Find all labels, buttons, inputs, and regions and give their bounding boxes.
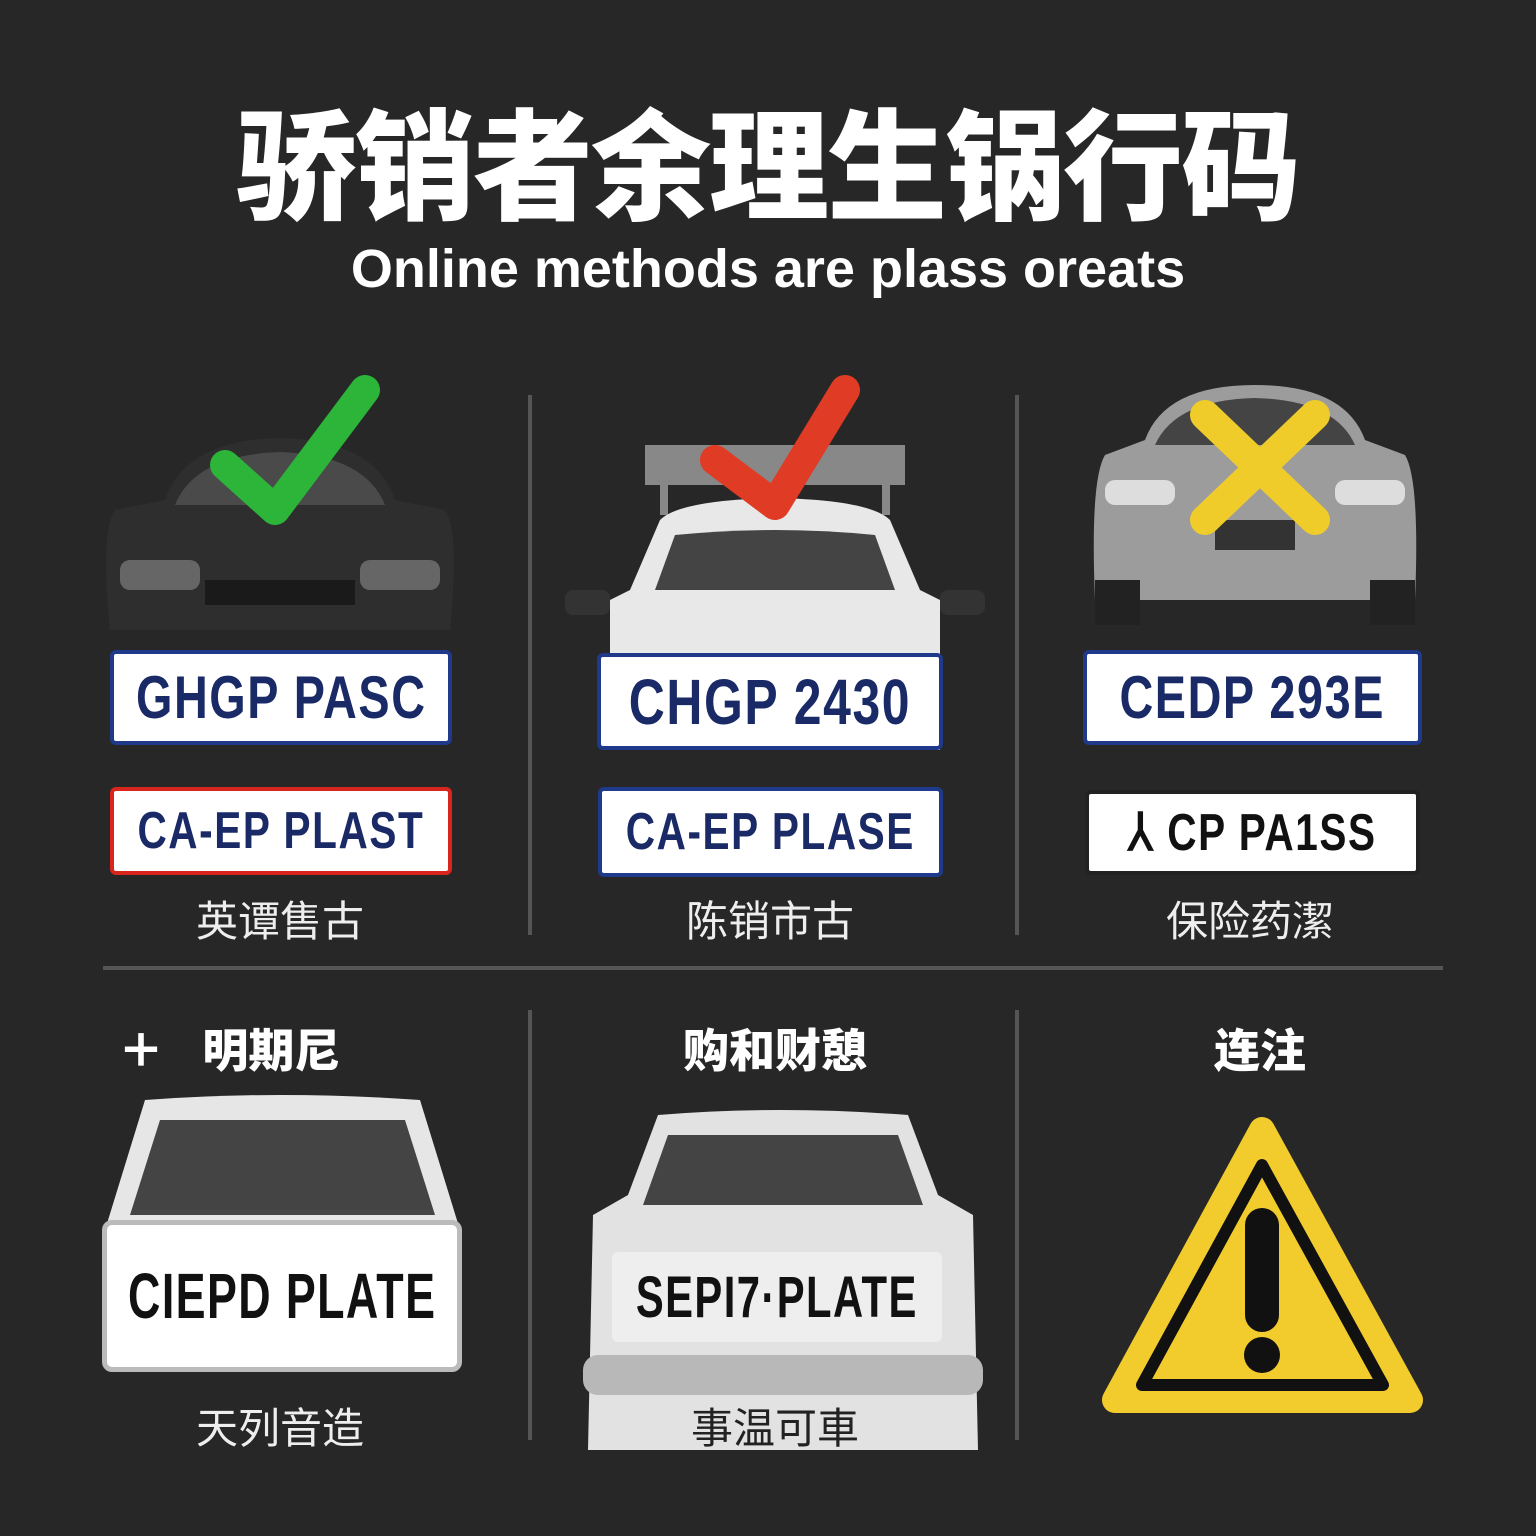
- panel: bottom-middle: [583, 1025, 983, 1452]
- car: white wagon: [108, 1095, 458, 1222]
- plate 2: [598, 787, 943, 877]
- panel: bottom-right: [1102, 1025, 1423, 1413]
- plate 2: ⅄ CP PA1SS: [1128, 804, 1377, 862]
- icon: green check: [210, 375, 380, 525]
- plate 2: CA-EP PLASE: [626, 803, 915, 861]
- plate: CIEPD PLATE: [128, 1260, 436, 1332]
- icon: warning triangle: [1102, 1117, 1423, 1413]
- title: 骄销者余理生锅行码: [237, 71, 1299, 245]
- panel: top-left car: [110, 375, 452, 945]
- plate 1: CEDP 293E: [1120, 664, 1385, 731]
- heading: 连注: [1214, 1025, 1306, 1077]
- plate: [612, 1252, 942, 1342]
- car: white car: [565, 445, 985, 750]
- caption: 天列音造: [196, 1405, 364, 1452]
- heading: ＋ 明期尼: [118, 1025, 340, 1077]
- plate: SEPI7·PLATE: [636, 1264, 918, 1330]
- car: white hatchback: [583, 1110, 983, 1450]
- plate 2: [110, 787, 452, 875]
- plate 1: [597, 653, 943, 750]
- plate 1: GHGP PASC: [136, 664, 426, 731]
- plate 1: CHGP 2430: [629, 666, 911, 738]
- caption: 英谭售古: [196, 898, 364, 945]
- car: dark sedan: [120, 452, 440, 605]
- caption: 事温可車: [691, 1405, 859, 1452]
- caption: 保险药潔: [1166, 898, 1334, 945]
- caption: 陈销市古: [686, 898, 854, 945]
- plate: [102, 1220, 462, 1372]
- panel: top-right car: [1083, 385, 1422, 945]
- plate 1: [1083, 650, 1422, 745]
- panel: bottom-left: [102, 1025, 462, 1452]
- plate 1: [110, 650, 452, 745]
- icon: red check: [700, 375, 860, 520]
- plate 2: CA-EP PLAST: [138, 802, 424, 860]
- panel: top-middle car: [565, 375, 985, 945]
- plate 2: [1085, 790, 1420, 875]
- icon: yellow X: [1190, 400, 1330, 535]
- heading: 购和财憩: [683, 1025, 867, 1077]
- subtitle: Online methods are plass oreats: [351, 239, 1185, 299]
- car: silver car: [1094, 385, 1416, 600]
